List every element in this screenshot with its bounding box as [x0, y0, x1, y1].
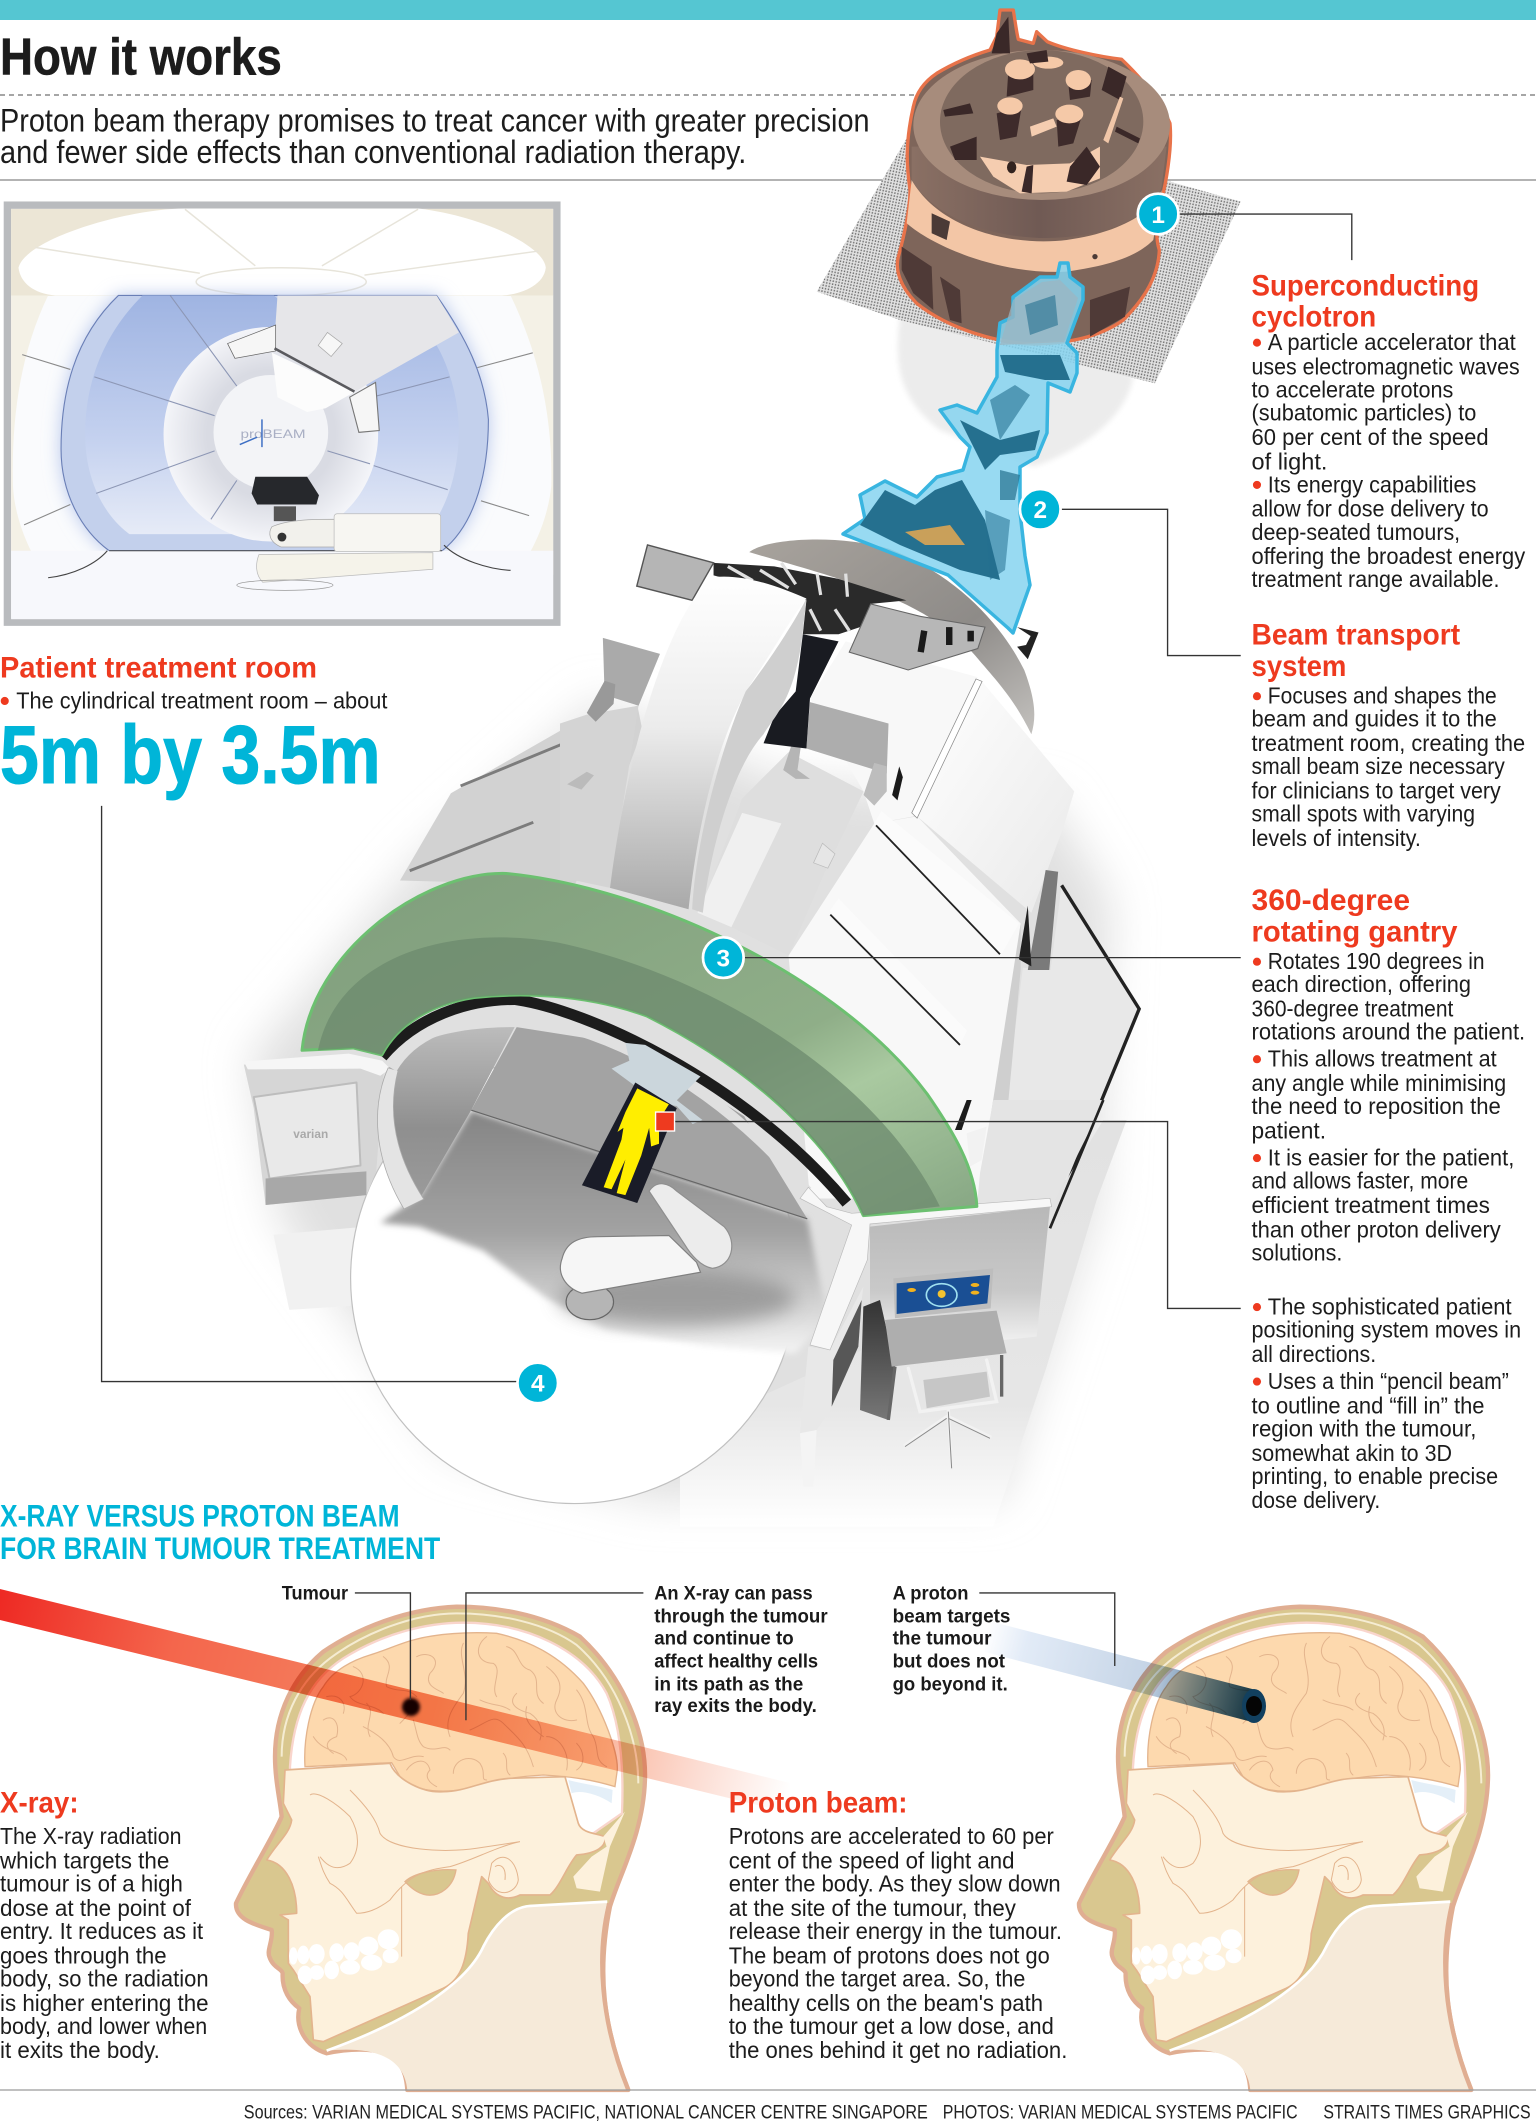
text block: beam transport system — [1252, 619, 1525, 851]
callout: x-ray path: An X-ray can pass — [654, 1583, 813, 1605]
text block: beam transport system: Beam transport — [1252, 619, 1460, 652]
peach front plate — [980, 147, 1100, 193]
text block: 360-degree rotating gantry: solutions. — [1252, 1239, 1342, 1265]
arc inner band — [318, 937, 940, 1216]
subtitle: Proton beam therapy promises to treat cancer with greater precision — [0, 102, 870, 138]
panel shade — [978, 924, 1021, 1198]
lower right panel — [789, 816, 1021, 1198]
wall edge — [1062, 885, 1139, 1180]
neck highlight — [327, 1902, 607, 2051]
text block: superconducting cyclotron: of light. — [1252, 448, 1327, 474]
illustration: superconducting cyclotron — [817, 10, 1241, 467]
illustration: head with X-ray beam — [236, 1607, 645, 2090]
arc outer band — [302, 873, 977, 1216]
text block: beam transport system: Focuses and shapes the — [1268, 683, 1497, 709]
cyclotron body — [897, 10, 1171, 344]
text block: 360-degree rotating gantry: This allows treatment at — [1268, 1046, 1497, 1072]
text block: beam transport system: system — [1252, 650, 1346, 683]
small black gap — [892, 766, 903, 800]
callout: tumour: Tumour — [282, 1583, 348, 1605]
door column — [800, 1287, 863, 1433]
teeth — [289, 1929, 399, 1984]
text block: x-ray: entry. It reduces as it — [0, 1918, 204, 1944]
machine background shadow — [250, 700, 1110, 1500]
text block: x-ray: is higher entering the — [0, 1990, 209, 2016]
ghost panel under jamb — [273, 1227, 364, 1310]
text block: x-ray: X-ray: — [0, 1786, 79, 1819]
text block: 360-degree rotating gantry: the need to reposition the — [1252, 1093, 1501, 1119]
gantry side arm — [228, 325, 276, 358]
text block: superconducting cyclotron: Superconducting — [1252, 269, 1479, 302]
dark gap — [764, 634, 839, 749]
text block: x-ray: The X-ray radiation — [0, 1823, 182, 1849]
floor bracket — [783, 743, 810, 779]
ceiling light — [18, 208, 546, 295]
text block: patient treatment room: The cylindrical treatment room – about — [16, 687, 388, 713]
mesh floor plate — [817, 138, 1241, 383]
jumble of cables — [714, 563, 906, 634]
jamb column — [377, 1068, 424, 1209]
wall edges — [22, 353, 533, 525]
floor lines — [48, 545, 511, 578]
text block: beam transport system: beam and guides it to the — [1252, 706, 1497, 732]
desk leg — [888, 1355, 1002, 1420]
recess — [940, 50, 1143, 193]
black bracket — [1017, 627, 1039, 659]
couch bed — [560, 1235, 701, 1293]
text block: 360-degree rotating gantry: than other proton delivery — [1252, 1216, 1501, 1242]
head skin outline — [236, 1607, 645, 2090]
white door jamb — [800, 1187, 1052, 1350]
proton beam end cap — [1242, 1689, 1266, 1723]
text block: patient positioning: somewhat akin to 3D — [1252, 1440, 1452, 1466]
marker: patient position — [656, 1112, 675, 1131]
wall edge — [1050, 1100, 1103, 1228]
marker 2 — [1020, 489, 1061, 530]
left floor — [560, 706, 639, 888]
marker 3 — [703, 937, 744, 978]
leader lines — [102, 214, 1352, 1720]
centre floor — [699, 752, 864, 956]
floor — [11, 551, 553, 619]
brain folds — [313, 1637, 607, 1787]
couch joint — [278, 533, 286, 542]
gantry head — [274, 295, 459, 392]
small block — [567, 772, 594, 790]
dark slit beside arc — [955, 1100, 972, 1130]
dark screen — [832, 1300, 862, 1407]
nozzle — [272, 353, 355, 412]
marker 1 — [1138, 194, 1178, 234]
jamb top strip — [244, 1054, 390, 1076]
diagonal strip — [912, 679, 982, 818]
footer credits: PHOTOS: VARIAN MEDICAL SYSTEMS PACIFIC — [943, 2102, 1298, 2123]
cyclotron base shadow — [898, 317, 1133, 467]
rear plate — [806, 702, 889, 774]
text block: patient positioning: printing, to enable precise — [1252, 1463, 1498, 1489]
marker 1: 1 — [1151, 202, 1165, 229]
right pillar — [1028, 870, 1058, 970]
skull details — [310, 1790, 520, 1957]
text block: proton beam: the ones behind it get no radiation. — [729, 2037, 1067, 2063]
blue ring — [61, 295, 488, 551]
text block: 360-degree rotating gantry: 360-degree treatment — [1252, 996, 1454, 1022]
subtitle: and fewer side effects than conventional radiation therapy. — [0, 134, 746, 170]
upper right panel — [810, 641, 978, 824]
text block: superconducting cyclotron: uses electromagnetic waves — [1252, 354, 1520, 380]
proton beam — [985, 1620, 1256, 1722]
callout: proton path: beam targets — [893, 1606, 1011, 1628]
black patient table — [582, 1082, 677, 1203]
marker 2: 2 — [1033, 497, 1047, 524]
plate bracket — [864, 763, 887, 806]
heading: x-ray versus proton beam: FOR BRAIN TUMOUR TREATMENT — [0, 1531, 440, 1566]
text block: patient positioning: Uses a thin “pencil beam” — [1268, 1368, 1509, 1394]
text block: proton beam: Proton beam: — [729, 1786, 908, 1819]
tan socket — [405, 1870, 456, 1895]
footer credits: Sources: VARIAN MEDICAL SYSTEMS PACIFIC, NATIONAL CANCER CENTRE SINGAPORE — [244, 2102, 928, 2123]
nozzle — [612, 1043, 703, 1124]
floor disc — [351, 1053, 797, 1504]
text block: proton beam: The beam of protons does not go — [729, 1942, 1050, 1968]
left interior wall — [386, 1027, 515, 1195]
callout: proton path — [893, 1583, 1011, 1695]
second head for proton beam — [1079, 1607, 1488, 2090]
rear rack left — [637, 545, 714, 600]
footer rule — [0, 2089, 1536, 2091]
text block: beam transport system: small beam size necessary — [1252, 753, 1505, 779]
left pillar — [11, 295, 48, 584]
text block: patient treatment room: 5m by 3.5m — [0, 708, 381, 801]
jamb panel — [254, 1082, 360, 1179]
blue halo — [61, 295, 488, 551]
panel: treatment room photo — [7, 205, 557, 622]
couch floor disc — [237, 580, 333, 590]
text block: 360-degree rotating gantry: and allows faster, more — [1252, 1168, 1468, 1194]
text block: beam transport system: small spots with varying — [1252, 801, 1475, 827]
right pillar — [511, 295, 553, 577]
pillar dark side — [1019, 906, 1031, 966]
gray crescent ring — [749, 539, 1034, 734]
text block: superconducting cyclotron: treatment range available. — [1252, 566, 1499, 592]
couch base — [257, 553, 433, 582]
left jamb — [244, 1057, 384, 1205]
text block: patient treatment room — [0, 651, 388, 801]
sphenoid blue — [568, 1780, 613, 1803]
text block: 360-degree rotating gantry: efficient treatment times — [1252, 1192, 1490, 1218]
dark recess — [860, 1300, 895, 1420]
text block: 360-degree rotating gantry: rotations around the patient. — [1252, 1019, 1525, 1045]
console desk — [885, 1311, 1007, 1367]
rack right dark slots — [921, 627, 971, 652]
arch inner flange — [692, 599, 806, 913]
rear rack right — [849, 604, 985, 670]
illustration: machine side panels — [400, 706, 1139, 1180]
text block: 360-degree rotating gantry: It is easier for the patient, — [1268, 1145, 1514, 1171]
gantry rail — [392, 1017, 807, 1191]
nozzle fin — [350, 382, 379, 432]
heading: x-ray versus proton beam: X-RAY VERSUS PROTON BEAM — [0, 1499, 400, 1534]
couch neck — [274, 506, 296, 521]
text block: patient positioning — [1252, 1294, 1521, 1513]
soft floor beyond the room — [680, 1120, 1127, 1527]
text block: proton beam: Protons are accelerated to 60 per — [729, 1823, 1054, 1849]
beam upper gray section — [1000, 280, 1078, 345]
disc seams — [94, 295, 450, 519]
logo mark — [240, 419, 262, 447]
band marks — [932, 213, 1098, 259]
white arch band — [610, 577, 806, 909]
cranial cavity — [290, 1623, 622, 1833]
illustration: control console area — [800, 1100, 1105, 1487]
text block: 360-degree rotating gantry: any angle while minimising — [1252, 1070, 1506, 1096]
text block: proton beam: enter the body. As they slow down — [729, 1871, 1061, 1897]
text block: proton beam: beyond the target area. So, the — [729, 1965, 1025, 1991]
text block: proton beam: to the tumour get a low dose, and — [729, 2013, 1054, 2039]
shadow under couch — [558, 1270, 795, 1326]
text block: proton beam: healthy cells on the beam's path — [729, 1990, 1043, 2016]
text block: superconducting cyclotron: cyclotron — [1252, 300, 1376, 333]
beam gold detail — [905, 525, 965, 545]
yellow patient figure — [604, 1088, 669, 1195]
text block: x-ray: body, and lower when — [0, 2013, 207, 2039]
title: How it works — [0, 27, 282, 85]
text block: patient positioning: The sophisticated patient — [1268, 1294, 1512, 1320]
tile — [318, 332, 342, 356]
wall panel — [870, 1207, 1050, 1347]
left side panel — [400, 706, 642, 885]
floor seam — [471, 1110, 807, 1219]
text block: x-ray: goes through the — [0, 1942, 167, 1968]
raised floor strip — [697, 813, 781, 927]
upper strip — [874, 811, 1019, 955]
text block: patient positioning: dose delivery. — [1252, 1487, 1380, 1513]
text block: superconducting cyclotron — [1252, 269, 1526, 592]
top colour bar — [0, 0, 1536, 20]
callout: x-ray path: affect healthy cells — [654, 1650, 818, 1672]
tumour in proton head — [1246, 1696, 1262, 1716]
probeam logo: proBEAM — [241, 427, 306, 441]
white rail beside arc — [967, 1127, 987, 1167]
text block: x-ray: which targets the — [0, 1848, 169, 1874]
text block: proton beam: cent of the speed of light and — [729, 1848, 1015, 1874]
nozzle dark band — [275, 348, 354, 392]
couch top — [252, 477, 319, 504]
text block: proton beam — [729, 1786, 1067, 2063]
right outer wall — [996, 885, 1139, 1180]
centre block — [814, 843, 835, 868]
text block: superconducting cyclotron: deep-seated tumours, — [1252, 519, 1460, 545]
text block: 360-degree rotating gantry: Rotates 190 degrees in — [1268, 948, 1485, 974]
text block: superconducting cyclotron: A particle accelerator that — [1268, 329, 1516, 355]
text block: superconducting cyclotron: allow for dose delivery to — [1252, 496, 1489, 522]
text block: patient positioning: all directions. — [1252, 1341, 1376, 1367]
photo frame — [7, 205, 557, 622]
text block: superconducting cyclotron: to accelerate protons — [1252, 377, 1453, 403]
left slats — [410, 735, 584, 871]
brain — [305, 1633, 617, 1791]
text block: 360-degree rotating gantry: each direction, offering — [1252, 971, 1471, 997]
marker 4: 4 — [531, 1371, 545, 1398]
black rail gap — [382, 999, 847, 1203]
text block: 360-degree rotating gantry: patient. — [1252, 1117, 1326, 1143]
callout: proton path: the tumour — [893, 1627, 992, 1649]
jamb lower strip — [266, 1171, 366, 1205]
text block: superconducting cyclotron: offering the broadest energy — [1252, 543, 1526, 569]
ceiling seams — [35, 209, 538, 296]
callout: proton path: go beyond it. — [893, 1673, 1008, 1695]
text block: x-ray — [0, 1786, 209, 2063]
text block: patient treatment room: Patient treatment room — [0, 651, 317, 684]
lower strip dark line — [830, 915, 960, 1045]
callout: proton path: but does not — [893, 1650, 1005, 1672]
dark lower recesses — [902, 247, 1130, 337]
illustration: gantry rear structure — [560, 539, 1074, 1198]
couch block — [334, 514, 441, 551]
inner disc — [213, 375, 328, 490]
text block: x-ray: it exits the body. — [0, 2037, 160, 2063]
text block: patient positioning: to outline and “fill in” the — [1252, 1392, 1485, 1418]
text block: beam transport system: treatment room, creating the — [1252, 730, 1525, 756]
top disc — [913, 50, 1170, 200]
text block: 360-degree rotating gantry — [1252, 884, 1525, 1265]
text block: x-ray: dose at the point of — [0, 1895, 192, 1921]
callout: x-ray path: and continue to — [654, 1627, 794, 1649]
jamb maker mark: varian — [293, 1127, 328, 1141]
text block: proton beam: release their energy in the tumour. — [729, 1918, 1062, 1944]
text block: x-ray: tumour is of a high — [0, 1871, 183, 1897]
beam inner dark parts — [860, 295, 1070, 580]
ceiling — [11, 209, 553, 296]
left plate — [603, 638, 660, 706]
couch base cylinder — [566, 1284, 614, 1320]
upper wall — [977, 1100, 1105, 1210]
text block: x-ray: body, so the radiation — [0, 1965, 209, 1991]
illustration: green gantry arc — [302, 873, 977, 1216]
text block: beam transport system: levels of intensity. — [1252, 825, 1421, 851]
couch arm — [270, 519, 335, 547]
text block: patient positioning: positioning system moves in — [1252, 1317, 1521, 1343]
lower post — [800, 1430, 817, 1487]
heading: x-ray versus proton beam — [0, 1499, 440, 1566]
couch arm — [649, 1184, 732, 1268]
text block: superconducting cyclotron: (subatomic particles) to — [1252, 400, 1476, 426]
cyclotron top parts — [943, 17, 1140, 193]
cream inner line — [282, 1613, 638, 1783]
inner blue hub — [85, 295, 459, 534]
text block: beam transport system: for clinicians to target very — [1252, 777, 1501, 803]
text block: proton beam: at the site of the tumour, they — [729, 1895, 1016, 1921]
text block: patient positioning: region with the tumour, — [1252, 1415, 1476, 1441]
far right panel — [917, 681, 1074, 913]
peach band — [907, 180, 1162, 272]
console chair — [905, 1360, 997, 1468]
marker 4 — [517, 1363, 558, 1403]
callout: x-ray path: ray exits the body. — [654, 1695, 817, 1717]
neck — [327, 1902, 628, 2090]
left bracket — [587, 681, 615, 722]
upper strip dark line — [876, 825, 1000, 954]
x-ray beam — [0, 1589, 790, 1813]
illustration: beam transport system — [843, 263, 1083, 633]
skull — [267, 1763, 605, 2042]
text block: 360-degree rotating gantry: 360-degree — [1252, 884, 1410, 917]
callout: proton path: A proton — [893, 1583, 968, 1605]
console monitor — [893, 1268, 993, 1318]
text block: superconducting cyclotron: 60 per cent of the speed — [1252, 424, 1489, 450]
callout: x-ray path: through the tumour — [654, 1606, 828, 1628]
inner round wall — [164, 327, 378, 542]
lower strip — [830, 899, 967, 1045]
upper side — [912, 147, 1167, 238]
text block: 360-degree rotating gantry: rotating gantry — [1252, 915, 1458, 948]
rear neck skin — [602, 1903, 628, 2090]
mastoid — [573, 1812, 625, 1892]
floor shadow — [380, 1110, 827, 1353]
callout: x-ray path: in its path as the — [654, 1673, 803, 1695]
header rules — [0, 95, 1536, 180]
tumour in x-ray head — [402, 1698, 420, 1716]
callout: x-ray path — [654, 1583, 828, 1717]
subtitle — [0, 102, 870, 170]
illustration: treatment room — [244, 999, 847, 1504]
beam transport body — [843, 263, 1083, 633]
text block: superconducting cyclotron: Its energy capabilities — [1268, 471, 1476, 497]
marker 3: 3 — [717, 945, 730, 972]
back wall — [471, 1027, 807, 1219]
footer credits — [244, 2102, 1531, 2123]
